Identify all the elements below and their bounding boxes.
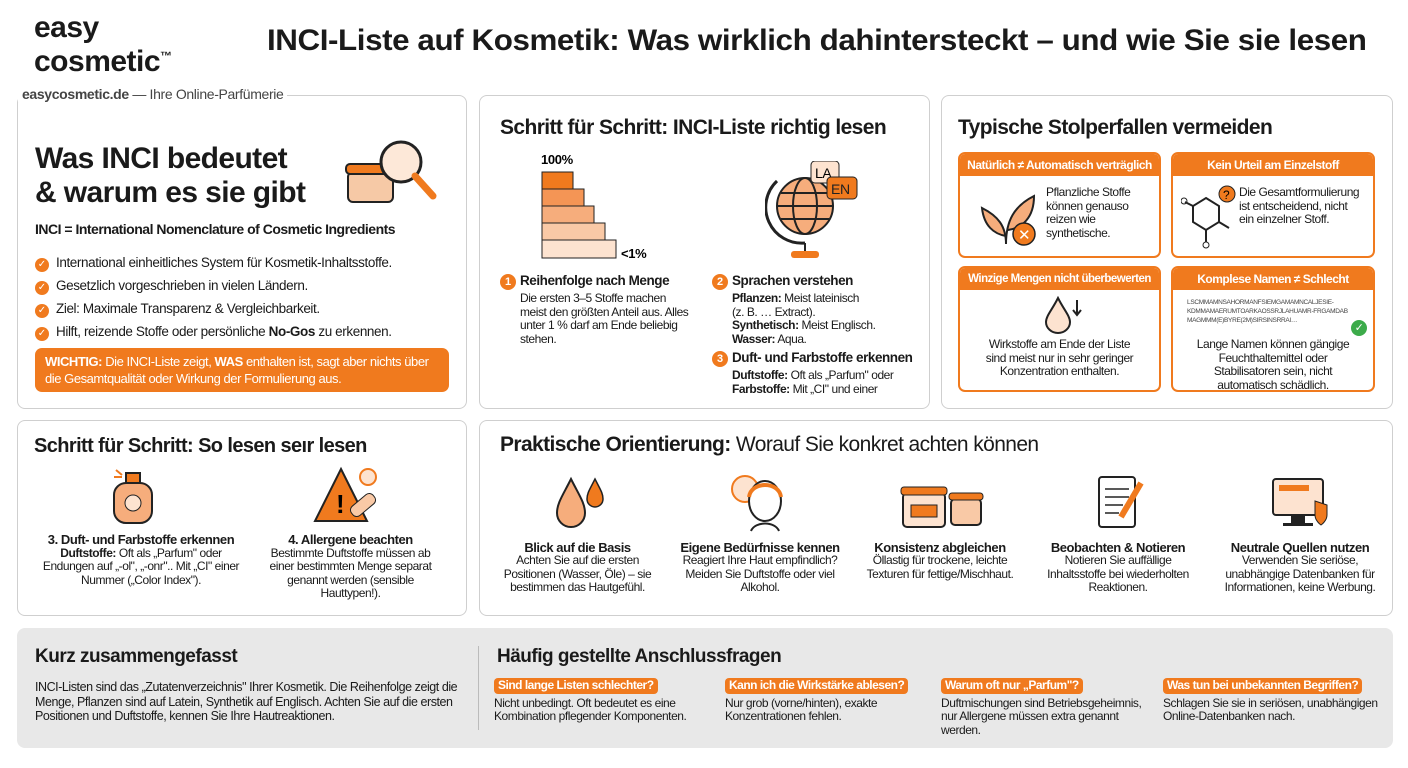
- step 4: 4. Allergene beachten: [288, 532, 413, 547]
- step 3: 3: [717, 353, 723, 365]
- logo: easy: [34, 11, 99, 44]
- heading: & warum es sie gibt: [35, 176, 305, 209]
- logo: [34, 11, 172, 78]
- heading: Was INCI bedeutet: [35, 142, 287, 175]
- chart: staircase: [541, 152, 647, 261]
- step 3: Duftstoffe: Oft als „Parfum" oder: [732, 368, 893, 382]
- panel: INCI meaning: [17, 95, 467, 409]
- faq 3: Warum oft nur „Parfum"?: [945, 678, 1079, 692]
- faq 1: [494, 678, 686, 723]
- panel: pitfalls: [941, 95, 1393, 409]
- card: complex names: MAGMMM(E)BYRE(2M)SIRSINSRRAI…: [1187, 317, 1297, 324]
- icon: drop: [1045, 296, 1082, 334]
- step 3: Duft- und Farbstoffe erkennen: [732, 350, 912, 365]
- chart: staircase: <1%: [621, 246, 647, 261]
- faq 2: [725, 678, 908, 723]
- callout: wichtig: [35, 348, 449, 392]
- card: complex names: Stabilisatoren sein, nicht: [1214, 364, 1332, 378]
- step 2: Sprachen verstehen: [732, 273, 853, 288]
- bullet list: Gesetzlich vorgeschrieben in vielen Ländern.: [56, 278, 308, 293]
- card: no single judgment: [1171, 152, 1375, 258]
- icon: check: ✓: [1355, 322, 1363, 334]
- icon: cream jar with magnifier: [345, 140, 436, 203]
- step 2: [712, 273, 875, 346]
- card: natural: Natürlich ≠ Automatisch verträglich: [967, 158, 1152, 172]
- bullet list: International einheitliches System für Kosmetik-Inhaltsstoffe.: [56, 255, 392, 270]
- panel: step by step 2: [17, 420, 467, 616]
- step 3: Duftstoffe: Oft als „Parfum" oder Endungen auf „-ol", „-onr".. Mit „CI" einer Nummer („Color Index").: [43, 546, 239, 586]
- FAQ heading: Häufig gestellte Anschlussfragen: [497, 646, 781, 667]
- step 2: Synthetisch: Meist Englisch.: [732, 318, 875, 332]
- faq 4: [1163, 678, 1378, 723]
- bullet list: ✓: [38, 282, 46, 293]
- step 2: Wasser: Aqua.: [732, 332, 806, 346]
- item: notes: [1047, 476, 1189, 594]
- item: sources: Neutrale Quellen nutzen: [1231, 540, 1369, 554]
- faq 3: Duftmischungen sind Betriebsgeheimnis, nur Allergene müssen extra genannt werden.: [941, 696, 1141, 736]
- bullet list: [35, 255, 392, 341]
- item: needs: Eigene Bedürfnisse kennen: [680, 540, 840, 554]
- card: natural: reizen wie: [1046, 212, 1096, 226]
- bullet list: ✓: [38, 259, 46, 270]
- card: tiny amounts: [958, 266, 1161, 392]
- icon: globe: [765, 161, 858, 258]
- item: consistency: Öllastig für trockene, leichte Texturen für fettige/Mischhaut.: [867, 553, 1013, 580]
- icon: molecule: ?: [1223, 188, 1230, 202]
- step 1: Reihenfolge nach Menge: [520, 273, 669, 288]
- faq 2: Nur grob (vorne/hinten), exakte Konzentrationen fehlen.: [725, 696, 877, 723]
- bullet list: Ziel: Maximale Transparenz & Vergleichbarkeit.: [56, 301, 320, 316]
- step 1: [500, 273, 688, 346]
- logo: cosmetic™: [34, 45, 172, 78]
- step 3: [712, 350, 912, 396]
- icon: globe: LA: [815, 165, 832, 181]
- item: consistency: [866, 486, 1013, 580]
- card: no single judgment: ist entscheidend, nicht: [1239, 198, 1347, 212]
- icon: leaves: [980, 194, 1036, 246]
- faq 2: Kann ich die Wirkstärke ablesen?: [729, 678, 904, 692]
- icon: perfume: [113, 469, 153, 524]
- heading: Praktische Orientierung: Worauf Sie konkret achten können: [500, 433, 1039, 456]
- heading: [35, 142, 306, 209]
- item: basis: Blick auf die Basis: [524, 540, 631, 554]
- card: complex names: Feuchthaltemittel oder: [1219, 350, 1327, 364]
- icon: globe: EN: [831, 181, 850, 197]
- card: complex names: Lange Namen können gängige: [1197, 337, 1349, 351]
- item: sources: Verwenden Sie seriöse, unabhängige Datenbanken für Informationen, keine Werbung.: [1225, 553, 1375, 594]
- step 3: Farbstoffe: Mit „CI" und einer: [732, 382, 877, 396]
- card: complex names: automatisch schädlich.: [1217, 378, 1329, 392]
- card: complex names: KDMMAMAERUMTOARKAOSSRJLAHUAMR-FRGAMDAB: [1187, 308, 1348, 315]
- item: sources: [1225, 478, 1375, 594]
- card: no single judgment: Kein Urteil am Einzelstoff: [1207, 158, 1339, 172]
- card: natural: synthetische.: [1046, 226, 1110, 240]
- card: complex names: Komplese Namen ≠ Schlecht: [1197, 272, 1349, 286]
- card: no single judgment: ein einzelner Stoff.: [1239, 212, 1329, 226]
- icon: leaves: ✕: [1018, 227, 1030, 244]
- icon: molecule: [1181, 186, 1236, 248]
- card: tiny amounts: Wirkstoffe am Ende der Liste: [989, 337, 1130, 351]
- item: notes: Beobachten & Notieren: [1051, 540, 1185, 554]
- step 1: Die ersten 3–5 Stoffe machen meist den größten Anteil aus. Alles unter 1 % darf am Ende beliebig stehen.: [520, 291, 688, 346]
- card: natural: [958, 152, 1161, 258]
- card: natural: können genauso: [1046, 198, 1128, 212]
- icon: check: [1351, 320, 1367, 336]
- chart: staircase: 100%: [541, 152, 574, 167]
- step 2: 2: [717, 276, 723, 288]
- faq 4: Schlagen Sie sie in seriösen, unabhängigen Online-Datenbanken nach.: [1163, 696, 1378, 723]
- subtitle label: easycosmetic.de — Ihre Online-Parfümerie: [22, 86, 283, 102]
- summary: [35, 646, 457, 723]
- card: complex names: LSCMMAMNSAHORMANFSIEMGAMAMNCALJESIE-: [1187, 299, 1334, 306]
- bullet list: ✓: [38, 305, 46, 316]
- step 1: 1: [505, 276, 511, 288]
- definition: INCI = International Nomenclature of Cosmetic Ingredients: [35, 221, 395, 237]
- faq 1: Sind lange Listen schlechter?: [498, 678, 654, 692]
- heading: Schritt für Schritt: So lesen seır lesen: [34, 435, 367, 457]
- summary: INCI-Listen sind das „Zutatenverzeichnis" Ihrer Kosmetik. Die Reihenfolge zeigt die Menge, Pflanzen sind auf Latein, Synthetik auf Englisch. Achten Sie auf die ersten Positionen und Duftstoffe, kennen Sie Ihre Hautreaktionen.: [35, 680, 457, 723]
- item: consistency: Konsistenz abgleichen: [874, 540, 1006, 554]
- card: tiny amounts: Konzentration enthalten.: [1000, 364, 1119, 378]
- callout: wichtig: WICHTIG: Die INCI-Liste zeigt, WAS enthalten ist, sagt aber nichts über die Gesamtqualität oder Wirkung der Formulierung aus.: [45, 354, 428, 386]
- item: needs: [680, 475, 840, 594]
- card: complex names: [1171, 266, 1375, 392]
- bullet list: ✓: [38, 328, 46, 339]
- panel: practical orientation: [479, 420, 1393, 616]
- item: basis: [504, 476, 652, 594]
- item: needs: Reagiert Ihre Haut empfindlich? Meiden Sie Duftstoffe oder viel Alkohol.: [683, 553, 837, 594]
- card: tiny amounts: sind meist nur in sehr geringer: [986, 350, 1133, 364]
- step 4: Bestimmte Duftstoffe müssen ab einer bestimmten Menge separat genannt werden (sensible Hauttypen!).: [270, 546, 431, 600]
- faq 1: Nicht unbedingt. Oft bedeutet es eine Kombination pflegender Komponenten.: [494, 696, 686, 723]
- card: natural: Pflanzliche Stoffe: [1046, 185, 1130, 199]
- heading: Typische Stolperfallen vermeiden: [958, 116, 1272, 139]
- icon: warning: [313, 466, 377, 522]
- summary: Kurz zusammengefasst: [35, 646, 237, 667]
- icon: warning: !: [336, 489, 344, 519]
- panel: summary and FAQ: [17, 628, 1393, 748]
- step 3: 3. Duft- und Farbstoffe erkennen: [48, 532, 234, 547]
- card: tiny amounts: Winzige Mengen nicht überbewerten: [968, 273, 1151, 285]
- step 2: Pflanzen: Meist lateinisch: [732, 291, 859, 305]
- title: INCI-Liste auf Kosmetik: Was wirklich dahintersteckt – und wie Sie sie lesen: [267, 24, 1366, 57]
- bullet list: Hilft, reizende Stoffe oder persönliche No-Gos zu erkennen.: [56, 324, 392, 339]
- card: no single judgment: Die Gesamtformulierung: [1239, 185, 1359, 199]
- heading: Schritt für Schritt: INCI-Liste richtig lesen: [500, 116, 886, 139]
- item: basis: Achten Sie auf die ersten Positionen (Wasser, Öle) – sie bestimmen das Hautgefühl.: [504, 553, 651, 594]
- step 2: (z. B. … Extract).: [732, 304, 815, 318]
- panel: step by step: [479, 95, 930, 409]
- faq 4: Was tun bei unbekannten Begriffen?: [1167, 678, 1358, 692]
- item: notes: Notieren Sie auffällige Inhaltsstoffe bei wiederholten Reaktionen.: [1047, 553, 1189, 594]
